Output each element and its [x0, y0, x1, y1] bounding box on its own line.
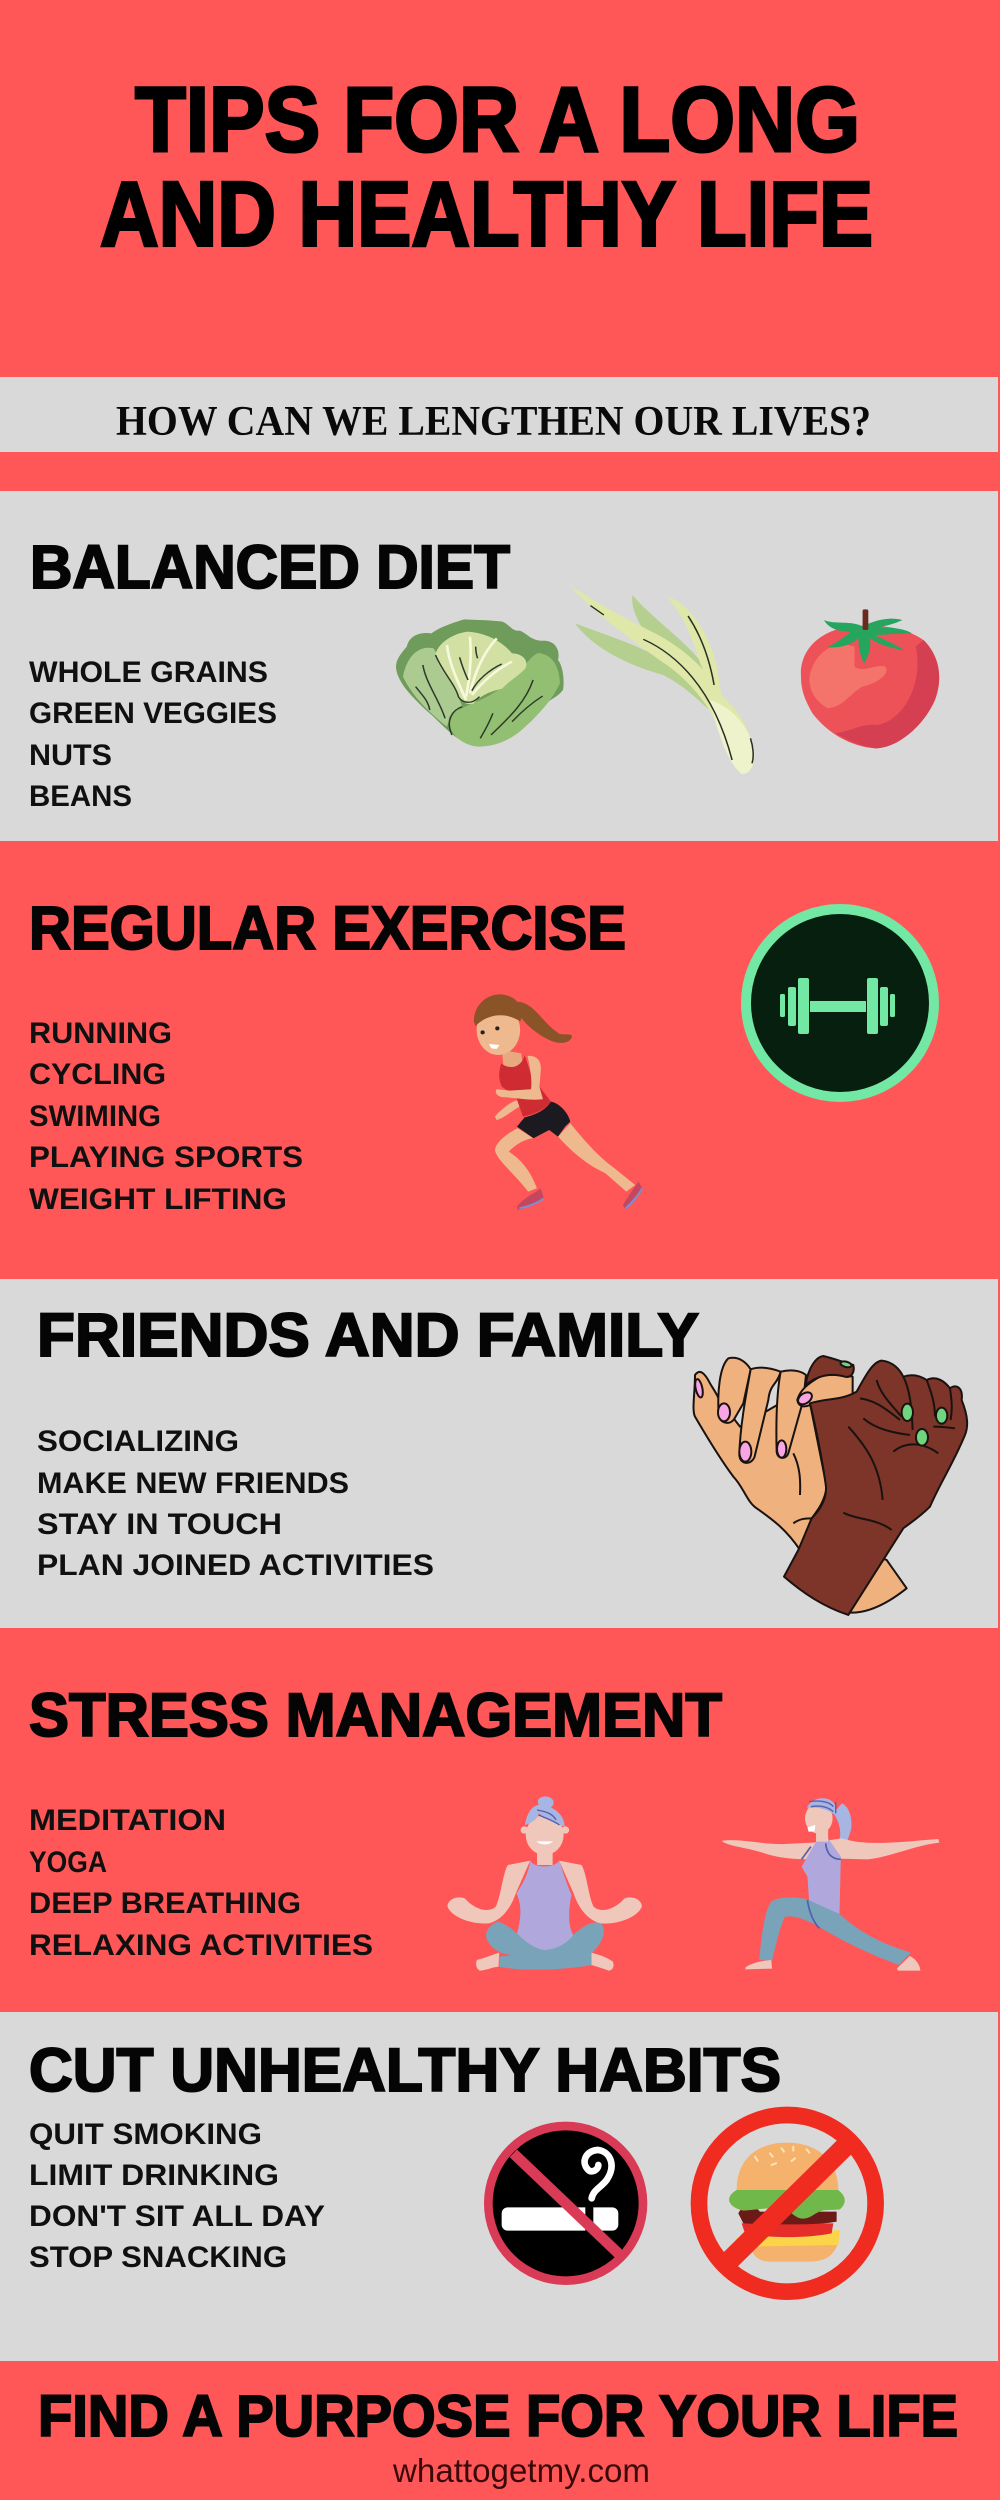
list: diet items: WHOLE GRAINS	[29, 656, 268, 689]
icon: runner	[474, 994, 642, 1210]
list: habit items: STOP SNACKING	[29, 2241, 287, 2274]
icon: linked pinky hands	[694, 1356, 967, 1615]
list: habit items: LIMIT DRINKING	[29, 2159, 279, 2192]
subtitle band: HOW CAN WE LENGTHEN OUR LIVES?	[116, 399, 871, 445]
list: exercise items: CYCLING	[29, 1058, 166, 1091]
light finger three	[776, 1370, 806, 1458]
panel: cut unhealthy habits	[0, 2012, 998, 2361]
list: friends items	[37, 1425, 434, 1582]
icon: no smoking	[488, 2126, 643, 2281]
footer source: whattogetmy.com	[392, 2452, 650, 2489]
list: friends items: PLAN JOINED ACTIVITIES	[37, 1549, 434, 1582]
list: exercise items	[29, 1017, 303, 1216]
title: AND HEALTHY LIFE	[100, 164, 873, 266]
list: stress items	[29, 1804, 373, 1962]
panel: stress management	[0, 1628, 1000, 2012]
title	[100, 69, 873, 266]
light palm	[694, 1372, 827, 1550]
list: stress items: DEEP BREATHING	[29, 1887, 301, 1920]
list: diet items	[29, 656, 277, 813]
dark pinky	[806, 1356, 854, 1385]
heading: stress management: STRESS MANAGEMENT	[29, 1681, 722, 1749]
footer callout: FIND A PURPOSE FOR YOUR LIFE	[38, 2384, 958, 2449]
icon: meditating woman	[448, 1797, 642, 1971]
list: stress items: RELAXING ACTIVITIES	[29, 1929, 373, 1962]
icon: yoga warrior pose	[722, 1798, 939, 1971]
list: diet items: BEANS	[29, 780, 132, 813]
panel: balanced diet	[0, 491, 998, 841]
list: exercise items: WEIGHT LIFTING	[29, 1183, 287, 1216]
icon: dumbbell badge	[746, 909, 934, 1097]
dark hand creases	[793, 1377, 955, 1530]
light wrist	[807, 1533, 907, 1613]
list: diet items: NUTS	[29, 739, 112, 772]
icon: lettuce	[396, 619, 564, 747]
list: exercise items: PLAYING SPORTS	[29, 1141, 303, 1174]
subtitle band	[0, 377, 998, 452]
dark hand	[784, 1361, 967, 1615]
list: exercise items: RUNNING	[29, 1017, 172, 1050]
light pinky	[797, 1375, 853, 1406]
light finger two	[739, 1368, 781, 1463]
title: TIPS FOR A LONG	[135, 69, 860, 171]
list: friends items: MAKE NEW FRIENDS	[37, 1467, 349, 1500]
list: friends items: STAY IN TOUCH	[37, 1508, 282, 1541]
icon: spring onion	[569, 585, 754, 774]
heading: friends and family: FRIENDS AND FAMILY	[37, 1301, 699, 1369]
light finger one	[718, 1358, 751, 1423]
panel: regular exercise	[0, 841, 1000, 1279]
list: stress items: MEDITATION	[29, 1804, 226, 1837]
list: diet items: GREEN VEGGIES	[29, 697, 277, 730]
icon: tomato	[801, 609, 939, 748]
heading: balanced diet: BALANCED DIET	[30, 533, 510, 601]
list: exercise items: SWIMING	[29, 1100, 161, 1133]
heading: regular exercise: REGULAR EXERCISE	[29, 894, 626, 962]
icon: no burger	[699, 2115, 876, 2292]
list: habit items: DON'T SIT ALL DAY	[29, 2200, 325, 2233]
list: stress items: YOGA	[29, 1846, 107, 1879]
list: habit items	[29, 2118, 325, 2274]
panel: friends and family	[0, 1279, 998, 1628]
list: friends items: SOCIALIZING	[37, 1425, 239, 1458]
heading: cut unhealthy habits: CUT UNHEALTHY HABITS	[29, 2036, 781, 2104]
list: habit items: QUIT SMOKING	[29, 2118, 262, 2151]
